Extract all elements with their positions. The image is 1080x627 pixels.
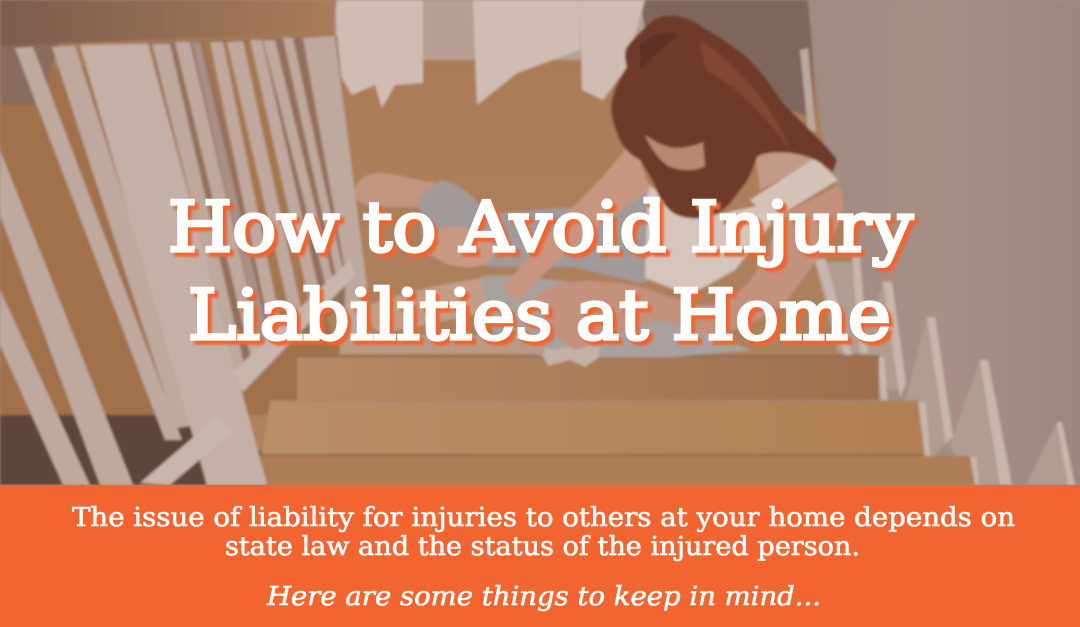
woman: tank strap [750,158,838,220]
woman: far foot [354,173,436,208]
stringer white strips [815,257,1075,485]
balusters [0,36,367,485]
woman: left arm and hand [503,137,650,302]
stair treads [258,355,975,485]
white curtains [335,0,645,108]
woman: knee through ripped jeans [426,222,498,272]
top handrail [0,0,337,46]
woman: jeans lower leg [480,275,752,357]
woman: near shin and foot [368,277,492,332]
dark curtain [640,0,815,120]
background photo: woman sitting on stairs [0,0,1080,490]
italic callout: Here are some things to keep in mind... [266,582,821,612]
left lower floor [0,60,340,415]
title: Liabilities at Home [188,276,891,356]
woman: hair [611,15,837,218]
intro text [72,503,1015,562]
woman: shoulder [755,130,832,190]
frayed hem [540,345,600,367]
hair highlights [700,40,790,150]
intro text: The issue of liability for injuries to others at your home depends on [72,503,1015,533]
intro text: state law and the status of the injured person. [225,532,860,562]
woman: face [645,135,705,170]
fringe shadow on the floor [340,335,545,354]
backdrop behind curtains [335,0,665,60]
woman: tank top [645,185,778,295]
title [168,188,913,356]
lower rail [140,260,355,485]
orange band [0,485,1080,627]
woman: jeans upper leg [420,180,660,283]
stair stringer pale panels [815,262,1075,485]
woman: right arm and hand [535,185,843,350]
wood floor landing [0,0,860,490]
wall on right [808,0,1080,485]
stringer strip near curtain [800,48,816,132]
balusters backing [150,36,365,380]
title: How to Avoid Injury [168,188,913,268]
